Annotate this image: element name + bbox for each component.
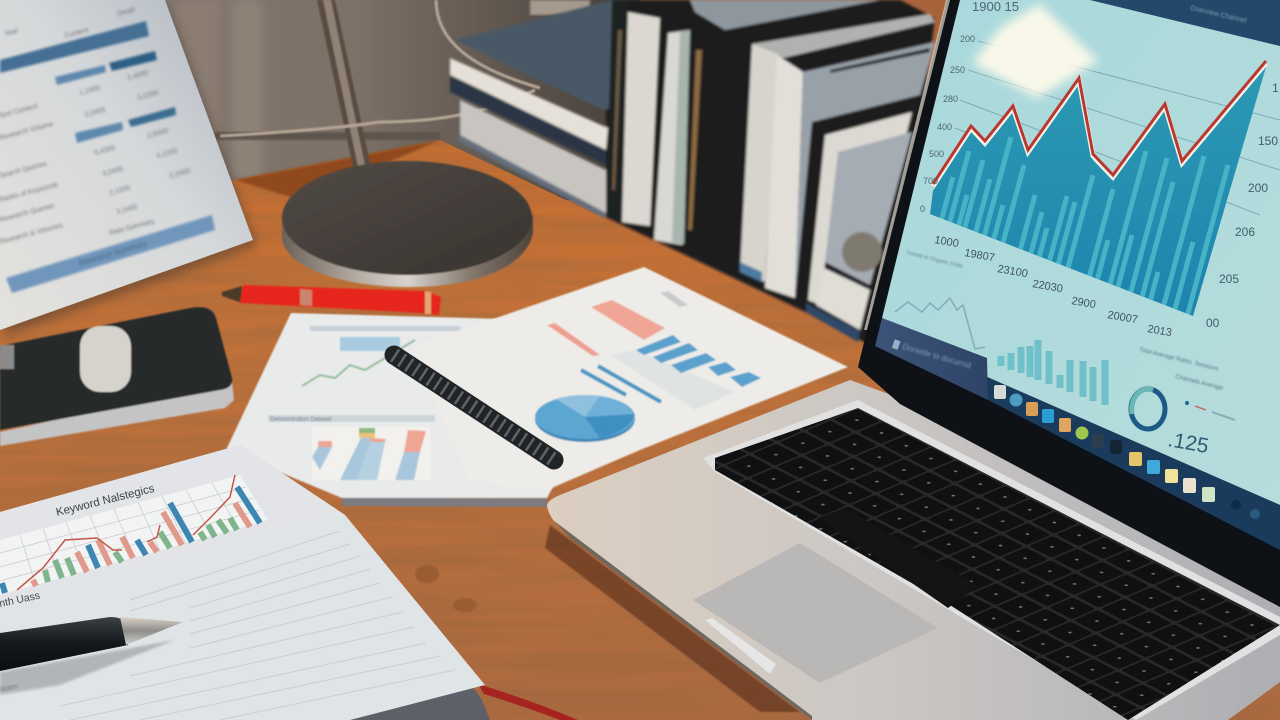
chart bottom axis labels xyxy=(933,234,1173,339)
donut value: .125 xyxy=(1166,428,1210,458)
chart bottom axis labels: 22030 xyxy=(1031,278,1064,295)
chart gridlines xyxy=(955,41,1280,215)
panel caption text: Total Average Rates, Sessions xyxy=(1139,347,1219,373)
chart right axis labels: 206 xyxy=(1235,225,1255,239)
chart bottom axis labels: 2013 xyxy=(1146,323,1173,339)
chart left axis labels: 280 xyxy=(943,94,958,104)
keyword chart xyxy=(0,475,268,595)
screen bezel xyxy=(858,0,1280,607)
chart inner bars xyxy=(940,136,1230,315)
panel caption text xyxy=(1139,347,1224,392)
chart left axis labels: 250 xyxy=(950,65,965,75)
chart right axis labels: 00 xyxy=(1206,316,1220,330)
table text: 2,1300 xyxy=(109,185,131,197)
document: left table report xyxy=(0,0,257,336)
lamp pole xyxy=(317,0,377,195)
small panel: line chart xyxy=(895,250,985,349)
table text: Research Volume xyxy=(0,121,54,142)
wall background xyxy=(0,0,640,200)
taskbar icons xyxy=(994,385,1260,519)
keyword chart trend line xyxy=(17,475,235,590)
table text: Ranks of Keywords xyxy=(0,181,59,204)
table text: Search Queries xyxy=(0,160,48,180)
notebook bottom-left xyxy=(0,445,578,720)
table text: Content xyxy=(64,27,89,40)
table text: Data Summary xyxy=(109,218,156,237)
main area chart xyxy=(930,60,1268,316)
notebook ruled lines xyxy=(60,531,455,720)
spiral binding xyxy=(394,355,554,460)
table text: Year xyxy=(4,27,20,38)
chart right axis labels: 205 xyxy=(1219,272,1239,286)
taskbar xyxy=(987,377,1280,550)
table text: Research & Volumes xyxy=(0,222,64,246)
table text: 3,2400 xyxy=(102,166,124,178)
lamp cable xyxy=(220,0,540,136)
wooden desk xyxy=(0,140,888,713)
bar chart on sheet: Demonstration Dataset xyxy=(270,417,332,423)
chart left axis labels xyxy=(920,0,1019,214)
table text: 2,4000 xyxy=(127,70,149,82)
keyboard surround xyxy=(703,400,1280,720)
table text xyxy=(0,6,191,246)
panel caption text: Channels Average xyxy=(1175,374,1224,392)
table text: 3,1400 xyxy=(116,204,138,216)
lying books xyxy=(450,0,612,218)
donut chart xyxy=(1131,389,1165,429)
red pencil xyxy=(222,285,441,315)
lamp base xyxy=(282,161,533,287)
small panel: bar chart xyxy=(1001,340,1105,405)
red trend line xyxy=(933,61,1266,186)
notebook header xyxy=(0,445,345,605)
chart bottom axis labels: 19807 xyxy=(963,247,996,264)
table text: Detail xyxy=(117,6,136,18)
chart right axis labels xyxy=(1206,81,1279,330)
table text: 5,4300 xyxy=(94,145,116,157)
chart right axis labels: 200 xyxy=(1248,181,1268,195)
legend marks xyxy=(1185,401,1235,420)
report sheet: lower left xyxy=(226,313,600,498)
chart left axis labels: 400 xyxy=(937,122,952,132)
chart right axis labels: 1 xyxy=(1272,81,1279,95)
bar chart on sheet xyxy=(268,415,435,480)
window glare xyxy=(972,4,1098,98)
table text: 4,1200 xyxy=(156,148,178,160)
pie chart xyxy=(535,395,635,442)
small panel: line chart: Trends in Organic Visits xyxy=(906,250,964,270)
pen on notebook xyxy=(0,617,183,695)
picture frame xyxy=(806,112,912,342)
chart left axis labels: 500 xyxy=(929,149,944,159)
chart bottom axis labels: 20007 xyxy=(1106,309,1139,326)
chart bottom axis labels: 1000 xyxy=(933,234,960,250)
document: left table report: Research Summary xyxy=(78,239,148,268)
table header bars xyxy=(0,21,215,293)
book shelf backing shadow xyxy=(606,0,935,345)
chart bottom axis labels: 23100 xyxy=(996,263,1029,280)
screen top bar: Overview Channel xyxy=(1190,5,1247,25)
screen top bar xyxy=(1090,0,1280,46)
laptop xyxy=(547,0,1280,720)
table text: 3,2400 xyxy=(84,107,106,119)
table text: 3,1200 xyxy=(137,90,159,102)
keyword chart bars xyxy=(2,487,260,593)
screen xyxy=(872,0,1280,572)
chart left axis labels: 0 xyxy=(920,204,925,214)
chart left axis labels: 200 xyxy=(960,34,975,44)
blue data bars xyxy=(636,335,761,387)
report sheet: upper right xyxy=(412,267,848,490)
bezel highlight xyxy=(864,0,950,330)
trackpad xyxy=(693,543,938,683)
table text: Research Queries xyxy=(0,202,55,224)
keyboard xyxy=(715,408,1280,720)
dock caption panel: Dorwide to documid xyxy=(901,342,972,370)
upright books xyxy=(606,0,935,298)
table text: 2,5000 xyxy=(147,128,169,140)
laptop base xyxy=(547,380,1280,720)
dock caption panel xyxy=(875,318,988,400)
chart title: Keyword Nalstegics xyxy=(55,483,156,519)
table text: 2,2400 xyxy=(169,168,191,180)
stack of books xyxy=(450,0,935,345)
chart left axis labels: 700 xyxy=(923,176,938,186)
center printed reports xyxy=(226,267,848,507)
line chart on sheet xyxy=(302,337,415,386)
table text: 1,2400 xyxy=(79,85,101,97)
chart right axis labels: 150 xyxy=(1258,134,1278,148)
desk lamp xyxy=(220,0,540,287)
black wallet with white pad xyxy=(0,307,234,446)
chart bottom axis labels: 2900 xyxy=(1070,295,1097,311)
